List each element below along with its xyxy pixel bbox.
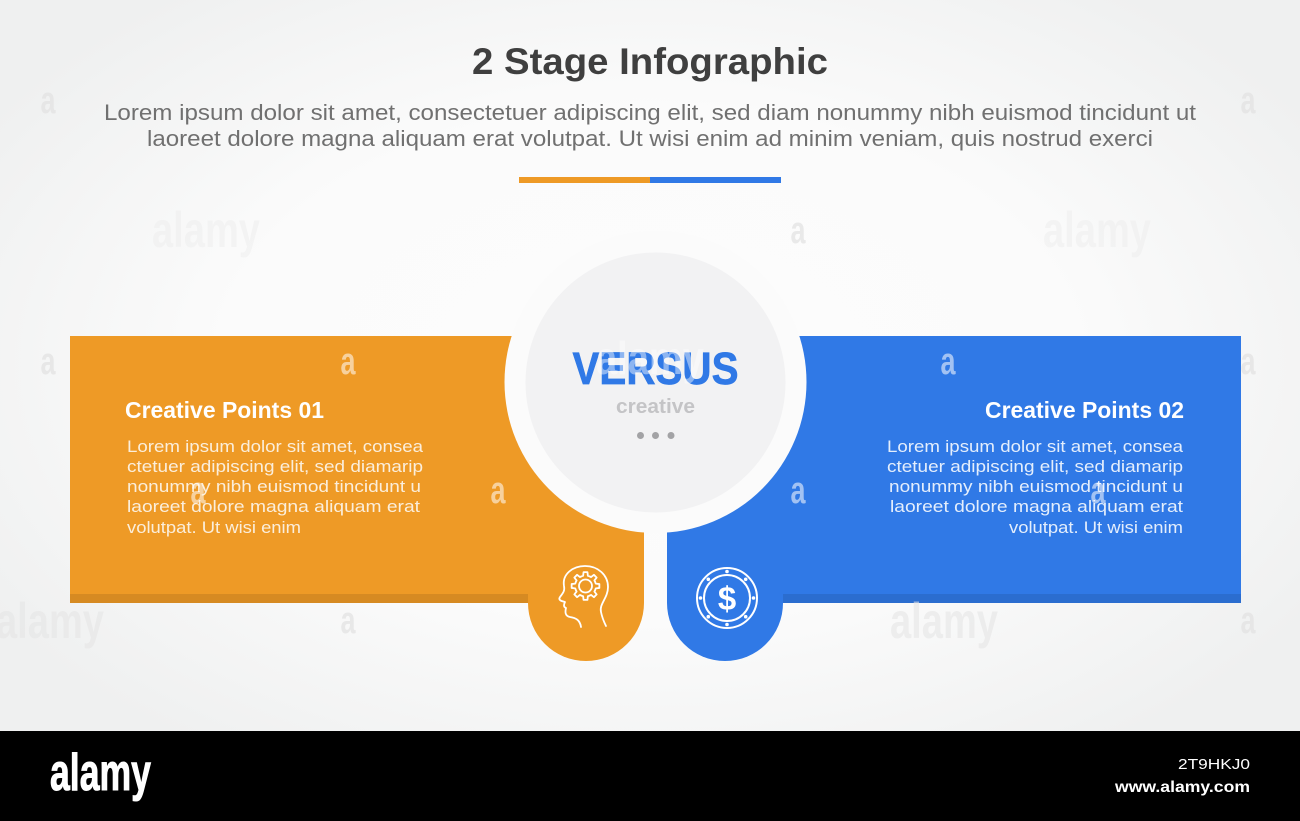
right body text: Lorem ipsum dolor sit amet, consea: [887, 437, 1184, 456]
watermarks: [0, 80, 1256, 649]
left body text: nonummy nibh euismod tincidunt u: [127, 477, 421, 496]
circle: versus: [504, 231, 806, 533]
footer url: www.alamy.com: [1114, 779, 1250, 796]
footer bar: [0, 731, 1300, 821]
watermarks: a: [490, 470, 506, 512]
subtitle text: laoreet dolore magna aliquam erat volutpat. Ut wisi enim ad minim veniam, quis nostrud exerci: [147, 126, 1153, 151]
footer logo: alamy: [50, 744, 151, 802]
left heading: Creative Points 01: [125, 397, 324, 423]
dots: [637, 432, 674, 439]
watermarks: a: [1240, 600, 1256, 642]
watermarks: a: [190, 470, 206, 512]
right body text: laoreet dolore magna aliquam erat: [890, 497, 1183, 516]
image id: 2T9HKJ0: [1178, 756, 1250, 773]
watermarks: a: [40, 341, 56, 383]
watermarks: alamy: [890, 593, 998, 649]
watermarks: alamy: [0, 593, 104, 649]
watermarks: a: [940, 341, 956, 383]
title: 2 Stage Infographic: [472, 41, 828, 82]
icon: dollar coin: $: [718, 580, 736, 617]
creative label: creative: [616, 396, 695, 418]
right body text: nonummy nibh euismod tincidunt u: [889, 477, 1183, 496]
left body text: ctetuer adipiscing elit, sed diamarip: [127, 457, 423, 476]
left body text: [127, 437, 424, 537]
title divider: [519, 177, 781, 183]
subtitle text: Lorem ipsum dolor sit amet, consectetuer adipiscing elit, sed diam nonummy nibh euismod tincidunt ut: [104, 100, 1196, 125]
watermarks: a: [1240, 341, 1256, 383]
left body text: volutpat. Ut wisi enim: [127, 518, 301, 537]
watermarks: a: [790, 470, 806, 512]
left body text: laoreet dolore magna aliquam erat: [127, 497, 420, 516]
right heading: Creative Points 02: [985, 397, 1184, 423]
versus label: VERSUS: [572, 343, 738, 394]
gear: [572, 572, 599, 600]
right body text: volutpat. Ut wisi enim: [1009, 518, 1183, 537]
watermarks: a: [790, 210, 806, 252]
watermarks: a: [40, 80, 56, 122]
right body text: ctetuer adipiscing elit, sed diamarip: [887, 457, 1183, 476]
panel: right blue: [667, 336, 1241, 661]
watermarks: a: [1090, 470, 1106, 512]
watermarks: a: [340, 600, 356, 642]
subtitle text: [104, 100, 1196, 151]
panel: left orange: [70, 336, 644, 661]
icon: dollar coin: [697, 568, 757, 628]
right body text: [887, 437, 1184, 537]
watermarks: alamy: [1043, 202, 1151, 258]
watermarks: a: [340, 341, 356, 383]
watermarks: alamy: [596, 332, 704, 384]
left body text: Lorem ipsum dolor sit amet, consea: [127, 437, 424, 456]
watermarks: a: [1240, 80, 1256, 122]
icon: head with gear: [559, 566, 608, 627]
watermarks: alamy: [152, 202, 260, 258]
